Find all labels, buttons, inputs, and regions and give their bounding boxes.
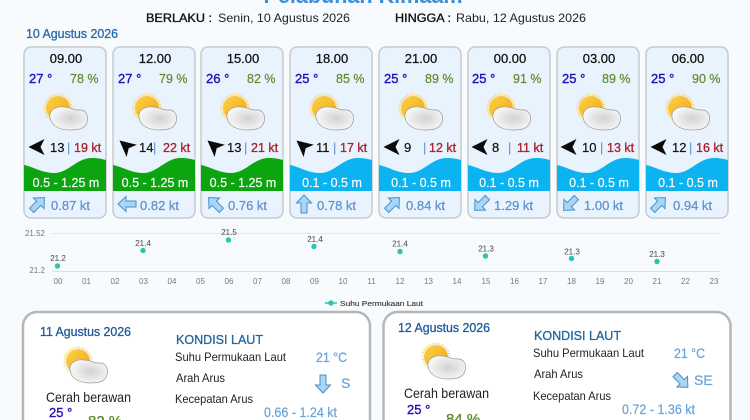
panel: 11 Agustus 2026: 25 ° (49, 405, 72, 420)
panel: 12 Agustus 2026: Cerah berawan (404, 385, 489, 401)
panel: 11 Agustus 2026: Arah Arus (176, 371, 225, 385)
panel: forecast 21.00 (379, 47, 461, 218)
panel: forecast 00.00: 25 ° (472, 71, 495, 86)
panel: forecast 15.00: 15.00 (227, 51, 259, 66)
panel: forecast 09.00: 0.87 kt (51, 198, 90, 213)
panel: forecast 09.00: 19 kt (74, 141, 102, 155)
chart: sea surface temperature: 07 (253, 277, 262, 286)
panel: 12 Agustus 2026: KONDISI LAUT (534, 328, 621, 343)
panel: forecast 09.00: 27 ° (29, 71, 52, 86)
chart: sea surface temperature: 21.3 (564, 248, 580, 256)
panel: forecast 09.00: | (67, 140, 70, 155)
panel: forecast 06.00: 25 ° (651, 71, 674, 86)
panel: forecast 00.00: 1.29 kt (494, 198, 533, 213)
panel: forecast 15.00: | (244, 140, 247, 155)
panel: 11 Agustus 2026: 11 Agustus 2026 (40, 325, 131, 339)
panel: 12 Agustus 2026: 21 °C (674, 345, 705, 361)
chart: sea surface temperature (25, 228, 720, 286)
panel: forecast 00.00: | (508, 140, 511, 155)
panel: 12 Agustus 2026: 0.72 - 1.36 kt (622, 401, 695, 417)
panel: forecast 21.00: 0.84 kt (406, 198, 445, 213)
panel: forecast 00.00: 91 % (513, 72, 542, 86)
chart: sea surface temperature: 20 (624, 277, 633, 286)
panel: forecast 18.00: 11 (316, 140, 330, 155)
panel: forecast 06.00: 0.94 kt (673, 198, 712, 213)
panel: forecast 03.00: | (600, 140, 603, 155)
chart: sea surface temperature: 04 (168, 277, 177, 286)
validity period header: Rabu, 12 Agustus 2026 (456, 11, 586, 25)
panel: forecast 03.00 (557, 47, 639, 218)
panel: forecast 15.00: 82 % (247, 72, 276, 86)
panel: forecast 03.00: 10 (582, 140, 596, 155)
panel: 12 Agustus 2026: SE (694, 372, 713, 388)
panel: forecast 15.00: 13 (227, 140, 241, 155)
panel: forecast 21.00: 0.1 - 0.5 m (391, 176, 451, 190)
panel: forecast 09.00: 0.5 - 1.25 m (33, 176, 99, 190)
panel: 11 Agustus 2026: Suhu Permukaan Laut (175, 350, 287, 364)
panel: forecast 18.00: 18.00 (316, 51, 348, 66)
chart: sea surface temperature: 21.4 (307, 235, 323, 244)
panel: forecast 00.00: 00.00 (494, 51, 526, 66)
panel: forecast 06.00: 06.00 (672, 51, 704, 66)
chart: sea surface temperature: 21.2 (29, 266, 46, 275)
panel: forecast 00.00: 8 (492, 140, 499, 155)
panel: forecast 18.00: 17 kt (340, 141, 368, 155)
panel: 12 Agustus 2026: Kecepatan Arus (533, 389, 611, 403)
chart: sea surface temperature: 23 (710, 277, 719, 286)
panel: forecast 18.00: | (333, 140, 336, 155)
panel: forecast 12.00: 12.00 (139, 51, 171, 66)
panel: forecast 12.00: 14 (139, 140, 153, 155)
chart: sea surface temperature: 01 (82, 277, 91, 286)
panel: forecast 03.00: 25 ° (562, 71, 585, 86)
chart: sea surface temperature: 00 (54, 277, 63, 286)
panel: forecast 03.00: 03.00 (583, 51, 615, 66)
panel: forecast 12.00: 0.82 kt (140, 198, 179, 213)
panel: forecast 06.00: 0.1 - 0.5 m (658, 176, 718, 190)
panel: forecast 18.00: 0.1 - 0.5 m (302, 176, 362, 190)
panel: 11 Agustus 2026: 21 °C (316, 349, 347, 365)
panel: forecast 12.00: | (153, 140, 156, 155)
chart: sea surface temperature: 03 (139, 277, 148, 286)
panel: forecast 06.00: | (689, 140, 692, 155)
panel: forecast 21.00: 89 % (425, 72, 454, 86)
panel: forecast 09.00: 13 (50, 140, 64, 155)
chart: sea surface temperature: 19 (596, 277, 605, 286)
chart: sea surface temperature: 10 (339, 277, 348, 286)
chart: sea surface temperature: 08 (282, 277, 291, 286)
panel: forecast 06.00: 12 (672, 140, 686, 155)
panel: forecast 06.00: 90 % (692, 72, 720, 86)
chart: sea surface temperature: 21.3 (478, 244, 494, 254)
panel: forecast 06.00: 16 kt (696, 141, 724, 155)
panel: forecast 15.00: 0.5 - 1.25 m (210, 176, 276, 190)
panel: forecast 09.00: 78 % (70, 72, 98, 86)
panel: 12 Agustus 2026: 25 ° (407, 402, 430, 417)
panel: forecast 15.00: 26 ° (206, 71, 229, 86)
chart: sea surface temperature: 12 (396, 277, 405, 286)
panel: 11 Agustus 2026: S (341, 375, 350, 391)
panel: forecast 15.00: 21 kt (251, 141, 279, 155)
chart: sea surface temperature: 02 (111, 277, 120, 286)
panel: forecast 00.00: 11 kt (517, 141, 544, 155)
chart: sea surface temperature: 21.2 (50, 254, 66, 263)
panel: forecast 00.00 (468, 47, 550, 218)
chart: sea surface temperature: 15 (482, 277, 491, 286)
panel: forecast 18.00 (290, 47, 372, 218)
chart legend: Suhu Permukaan Laut (340, 299, 424, 308)
chart: sea surface temperature: 21.3 (649, 250, 665, 259)
panel: forecast 12.00: 27 ° (118, 71, 141, 86)
panel: forecast 15.00: 0.76 kt (228, 198, 267, 213)
panel: forecast 12.00 (113, 47, 195, 218)
chart: sea surface temperature: 21.4 (135, 239, 151, 248)
chart: sea surface temperature: 16 (510, 277, 519, 286)
panel: forecast 21.00: 9 (404, 140, 411, 155)
panel: 12 Agustus 2026: 12 Agustus 2026 (398, 321, 490, 335)
panel: forecast 18.00: 85 % (336, 72, 364, 86)
panel: forecast 12.00: 79 % (159, 72, 188, 86)
panel: forecast 21.00: 21.00 (405, 51, 437, 66)
chart: sea surface temperature: 11 (367, 277, 376, 286)
panel: forecast 03.00: 1.00 kt (584, 198, 623, 213)
chart: sea surface temperature: 21.52 (25, 229, 46, 238)
panel: 11 Agustus 2026 (23, 312, 370, 420)
panel: forecast 21.00: 25 ° (384, 71, 407, 86)
panel: forecast 15.00 (201, 47, 283, 218)
panel: forecast 00.00: 0.1 - 0.5 m (479, 176, 539, 190)
validity period header: HINGGA : (395, 11, 451, 25)
chart: sea surface temperature: 14 (453, 277, 462, 286)
panel: forecast 21.00: 12 kt (429, 141, 457, 155)
chart: sea surface temperature: 17 (539, 277, 548, 286)
panel: forecast 03.00: 89 % (602, 72, 630, 86)
validity period header: BERLAKU : (146, 11, 212, 25)
panel: forecast 06.00 (646, 47, 728, 218)
panel: 11 Agustus 2026: KONDISI LAUT (176, 332, 263, 347)
chart: sea surface temperature: 21.5 (221, 228, 237, 237)
panel: forecast 18.00: 25 ° (295, 71, 318, 86)
chart: sea surface temperature: 22 (681, 277, 690, 286)
panel: 11 Agustus 2026: Cerah berawan (46, 389, 131, 405)
panel: 11 Agustus 2026: 0.66 - 1.24 kt (264, 404, 337, 420)
chart: sea surface temperature: 13 (424, 277, 433, 286)
panel: forecast 12.00: 22 kt (163, 141, 191, 155)
panel: forecast 12.00: 0.5 - 1.25 m (122, 176, 188, 190)
date heading: 10 Agustus 2026 (26, 27, 118, 41)
chart: sea surface temperature: 21.4 (392, 240, 408, 248)
panel: forecast 18.00: 0.78 kt (317, 198, 356, 213)
validity period header (146, 11, 586, 25)
panel: forecast 21.00: | (423, 140, 426, 155)
panel: forecast 03.00: 0.1 - 0.5 m (569, 176, 629, 190)
panel: 11 Agustus 2026: Kecepatan Arus (175, 392, 253, 406)
panel: forecast 09.00: 09.00 (50, 51, 82, 66)
panel: 12 Agustus 2026: Arah Arus (534, 367, 583, 381)
chart: sea surface temperature: 21 (653, 277, 662, 286)
panel: forecast 03.00: 13 kt (607, 141, 635, 155)
chart: sea surface temperature: 18 (567, 277, 576, 286)
panel: 12 Agustus 2026 (384, 312, 730, 420)
chart: sea surface temperature: 09 (310, 277, 319, 286)
panel: forecast 09.00 (24, 47, 106, 218)
chart: sea surface temperature: 06 (225, 277, 234, 286)
validity period header: Senin, 10 Agustus 2026 (218, 11, 350, 25)
chart: sea surface temperature: 05 (196, 277, 205, 286)
panel: 12 Agustus 2026: Suhu Permukaan Laut (533, 346, 645, 360)
